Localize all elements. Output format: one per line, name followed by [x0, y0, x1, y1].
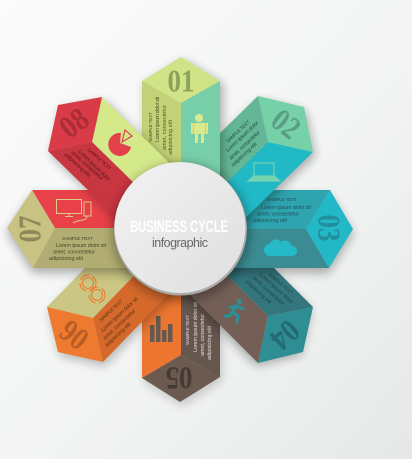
sample text 02: SAMPLE TEXT — [225, 120, 251, 144]
sample text 08: SAMPLE TEXT — [86, 147, 112, 171]
icon: person — [191, 114, 208, 143]
number 01: 01 — [168, 62, 194, 98]
sample text 07: amet, consectetur — [53, 250, 95, 256]
icon: gears — [80, 275, 105, 303]
icon: bar chart — [150, 316, 172, 342]
sample text 08: Lorem ipsum dolor — [77, 149, 111, 183]
block 06 — [47, 217, 192, 366]
sample text 04 — [244, 272, 294, 307]
icon: computer — [56, 200, 91, 223]
sample text 08: adipisicing elit — [63, 152, 92, 179]
sample text 08 — [63, 147, 112, 183]
sample text 07 — [49, 236, 106, 262]
sample text 03 — [253, 197, 312, 224]
sample text 02: adipisicing elit — [230, 141, 259, 168]
centre disc — [112, 162, 250, 301]
number 07: 07 — [12, 216, 48, 242]
number 08: 08 — [52, 100, 95, 145]
subtitle: infographic — [152, 236, 208, 250]
block 03 — [180, 190, 353, 273]
sample text 06: adipisicing elit — [104, 321, 133, 348]
number 06: 06 — [52, 313, 95, 358]
sample text 06: Lorem ipsum dolor sit — [100, 296, 140, 333]
sample text 08: amet, consectetur — [70, 150, 104, 182]
block 02 — [170, 96, 315, 242]
sample text 01: adipisicing elit — [168, 120, 174, 155]
icon: runner — [225, 299, 243, 322]
sample text 01 — [148, 96, 174, 155]
sample text 01: Lorem ipsum dolor sit — [155, 96, 161, 142]
block 04 — [168, 219, 313, 366]
icon: laptop — [248, 163, 280, 181]
icon: pie chart — [108, 130, 132, 156]
sample text 06 — [98, 296, 140, 348]
sample text 05 — [185, 302, 213, 360]
block 08 — [48, 97, 193, 241]
sample text 03: adipisicing elit — [253, 218, 288, 224]
sample text 07: SAMPLE TEXT — [62, 236, 93, 241]
sample text 02 — [225, 120, 262, 168]
sample text 05: adipisicing elit — [207, 326, 213, 360]
sample text 03: Lorem ipsum dolor sit — [261, 205, 312, 211]
block 05 — [142, 228, 222, 406]
sample text 02: Lorem ipsum dolor — [225, 120, 260, 153]
sample text 03: amet, consectetur — [257, 212, 299, 218]
title: BUSINESS CYCLE — [130, 217, 228, 236]
number 02: 02 — [265, 101, 308, 146]
sample text 04: SAMPLE TEXT — [267, 272, 294, 295]
sample text 05: amet, consectetur — [200, 314, 206, 356]
sample text 04: amet, consectetur — [251, 275, 285, 307]
block 01 — [142, 57, 223, 228]
sample text 04: Lorem ipsum dolor — [258, 272, 294, 305]
icon: cloud — [264, 240, 297, 256]
sample text 04: adipisicing elit — [244, 279, 273, 306]
number 05: 05 — [166, 360, 192, 396]
number 04: 04 — [263, 313, 307, 358]
sample text 05: SAMPLE TEXT — [185, 315, 190, 345]
sample text 06: SAMPLE TEXT — [98, 299, 124, 323]
block 07 — [7, 190, 180, 273]
sample text 01: amet, consectetur — [162, 105, 168, 150]
sample text 05: Lorem ipsum dolor sit — [193, 302, 199, 352]
sample text 01: SAMPLE TEXT — [148, 112, 153, 142]
sample text 03: SAMPLE TEXT — [267, 197, 297, 202]
sample text 02: amet, consectetur — [228, 130, 262, 161]
sample text 07: Lorem ipsum dolor sit — [56, 243, 106, 249]
sample text 07: adipisicing elit — [49, 256, 84, 262]
sample text 06: amet, consectetur — [102, 308, 137, 341]
number 03: 03 — [312, 214, 348, 242]
